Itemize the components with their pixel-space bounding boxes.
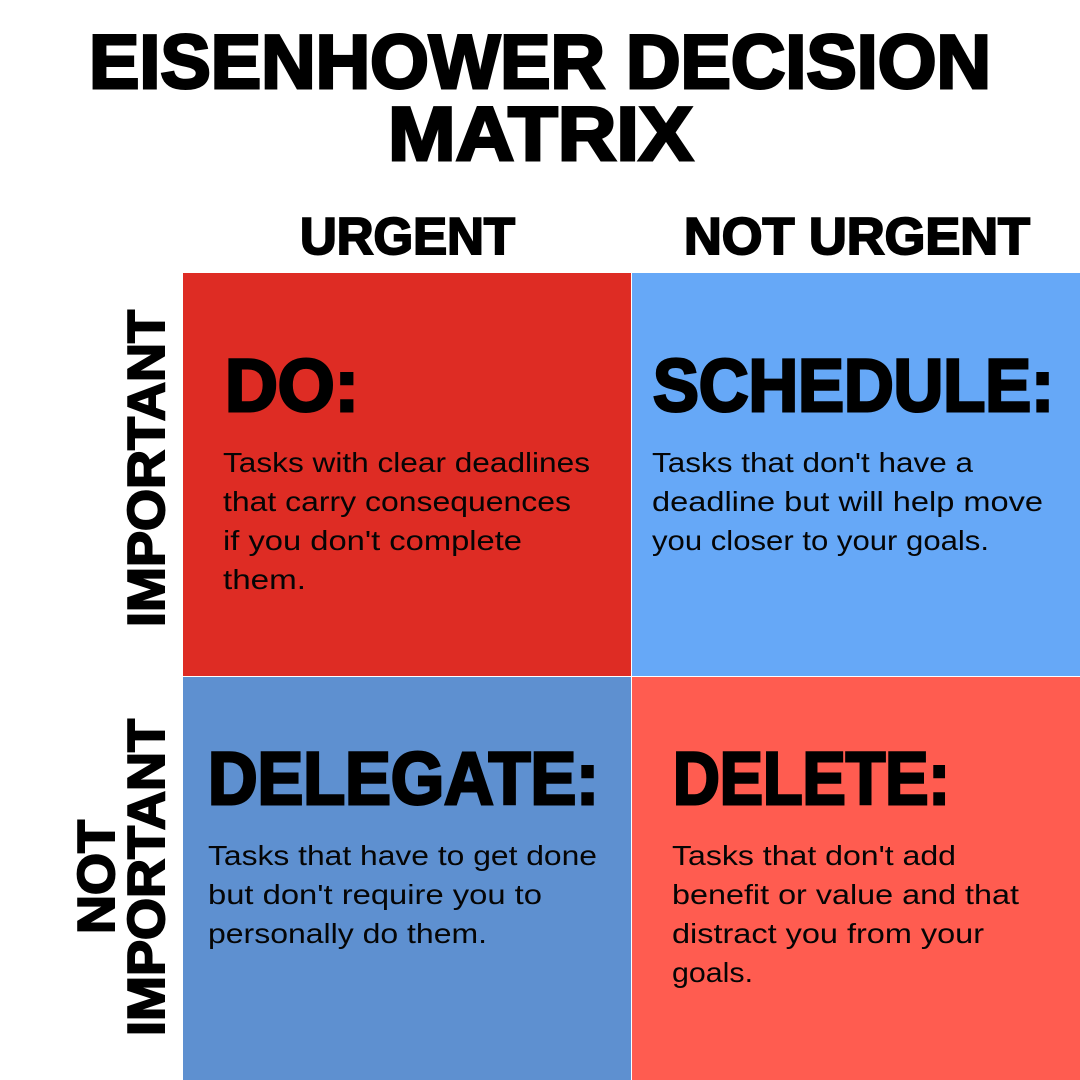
row heading: not important: NOT: [68, 820, 126, 934]
title: MATRIX: [388, 92, 693, 177]
text: do description: [223, 447, 590, 595]
column heading: urgent: URGENT: [300, 208, 515, 266]
text: delegate description: [208, 840, 597, 949]
text: schedule description: deadline but will help move: [652, 486, 1043, 517]
heading: delegate: DELEGATE:: [208, 737, 599, 820]
title: [89, 20, 991, 177]
text: do description: Tasks with clear deadlines: [223, 447, 590, 478]
column heading: not urgent: NOT URGENT: [684, 208, 1030, 266]
panel: schedule: [632, 273, 1080, 676]
text: do description: that carry consequences: [223, 486, 571, 517]
text: delegate description: Tasks that have to get done: [208, 840, 597, 871]
text: schedule description: [652, 447, 1043, 556]
text: do description: them.: [223, 564, 306, 595]
text: delete description: goals.: [672, 957, 753, 988]
text: delete description: benefit or value and that: [672, 879, 1019, 910]
text: delete description: distract you from your: [672, 918, 984, 949]
heading: schedule: SCHEDULE:: [653, 344, 1054, 427]
text: delete description: Tasks that don't add: [672, 840, 956, 871]
heading: delete: DELETE:: [673, 737, 950, 820]
row heading: not important: [68, 719, 176, 1036]
text: do description: if you don't complete: [223, 525, 522, 556]
heading: do: DO:: [225, 344, 359, 427]
panel: delete: [632, 677, 1080, 1080]
text: schedule description: you closer to your goals.: [652, 525, 989, 556]
text: schedule description: Tasks that don't have a: [652, 447, 973, 478]
text: delegate description: but don't require you to: [208, 879, 542, 910]
title: EISENHOWER DECISION: [89, 20, 991, 105]
row heading: not important: IMPORTANT: [118, 719, 176, 1036]
panel: do: [183, 273, 631, 676]
panel: delegate: [183, 677, 631, 1080]
row heading: important: IMPORTANT: [118, 310, 176, 627]
text: delegate description: personally do them.: [208, 918, 487, 949]
text: delete description: [672, 840, 1019, 988]
